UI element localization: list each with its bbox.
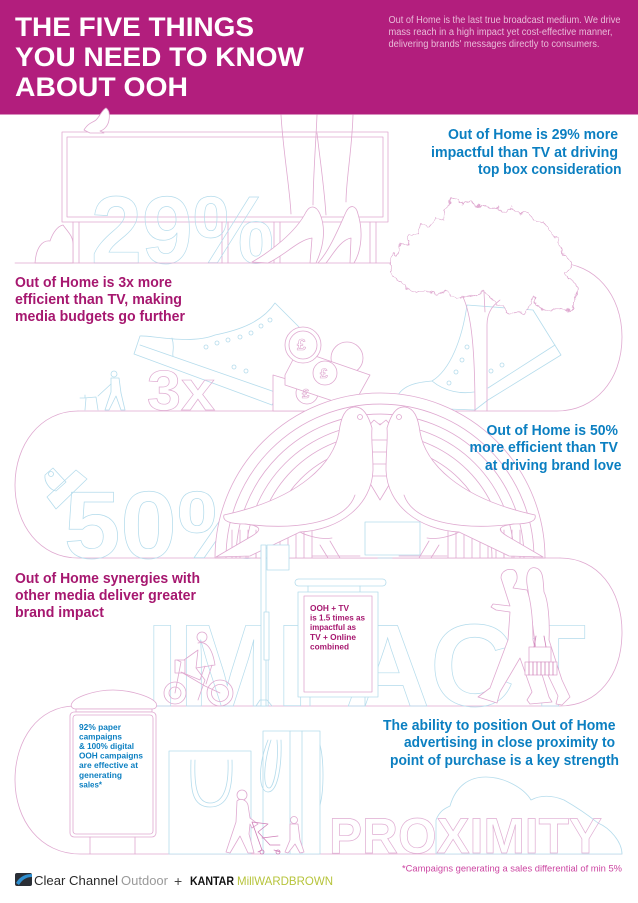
heading: proximity: The ability to position Out of Home <box>383 718 616 734</box>
icon: coins and notes: £ <box>302 386 310 401</box>
legs and heels <box>252 115 361 263</box>
heading: synergies: other media deliver greater <box>15 588 196 604</box>
heading: 3x <box>15 275 185 325</box>
heading: proximity: point of purchase is a key strength <box>390 753 619 769</box>
billboard text: 92% paper <box>79 723 121 732</box>
woman with stroller <box>226 790 280 854</box>
heading: 29 percent: top box consideration <box>478 162 622 178</box>
heading: 50 percent: Out of Home is 50% <box>486 423 618 439</box>
shelter text: impactful as <box>310 623 357 632</box>
panel: 3x illustration <box>78 197 622 423</box>
cloud <box>35 225 73 263</box>
billboard text: are effective at <box>79 761 138 770</box>
logos: + <box>174 873 182 889</box>
billboard text: campaigns <box>79 732 123 742</box>
icon: coins and notes: £ <box>320 365 328 381</box>
logos: MillWARDBROWN <box>237 874 333 888</box>
big number 50%: 50% <box>64 472 267 579</box>
big number 3x: 3x <box>147 359 215 423</box>
heading: 50 percent: at driving brand love <box>485 458 622 474</box>
bus shelter <box>295 579 386 706</box>
heading: synergies: brand impact <box>15 605 104 621</box>
shopping bags <box>169 731 323 854</box>
heading: 3x: media budgets go further <box>15 309 185 325</box>
intro text: mass reach in a high impact yet cost-effective manner, <box>388 27 612 38</box>
shelter text: combined <box>310 642 349 652</box>
child <box>285 816 304 853</box>
billboard text: generating <box>79 771 122 780</box>
tree crown <box>390 197 578 314</box>
footnote: *Campaigns generating a sales differential of min 5% <box>402 864 622 874</box>
logos <box>15 873 333 889</box>
neck stripes <box>365 420 395 500</box>
icon: clear channel mark <box>15 873 32 886</box>
billboard <box>62 132 388 263</box>
heading: proximity <box>383 718 619 769</box>
title: THE FIVE THINGS <box>15 12 254 42</box>
shelter text: is 1.5 times as <box>310 614 366 622</box>
billboard text: sales* <box>79 780 103 790</box>
intro text <box>388 15 620 50</box>
title <box>15 12 305 102</box>
heading: 50 percent <box>470 423 622 474</box>
sneaker right <box>397 305 561 410</box>
intro text: delivering brands' messages directly to consumers. <box>388 39 600 50</box>
billboard text: & 100% digital <box>79 742 134 751</box>
icon: coins and notes <box>273 327 370 411</box>
curve band right <box>75 558 622 706</box>
billboard text: OOH campaigns <box>79 752 144 760</box>
logos: KANTAR <box>190 874 234 888</box>
intro text: Out of Home is the last true broadcast medium. We drive <box>388 15 620 26</box>
logos: Outdoor <box>121 873 169 888</box>
icon: coins and notes: £ <box>297 337 306 354</box>
heading: synergies <box>15 571 200 621</box>
panel: 29 percent illustration <box>15 108 390 284</box>
icon: person walking dog <box>80 371 125 410</box>
cyclist <box>164 632 233 706</box>
billboard left <box>70 690 157 854</box>
cloud right <box>436 777 622 854</box>
couple walking with bags <box>478 568 570 705</box>
ground line <box>15 262 390 264</box>
tree trunk <box>463 292 500 411</box>
monitor <box>365 522 420 558</box>
curve band left <box>15 411 560 558</box>
big number 29%: 29% <box>91 177 274 284</box>
sneaker left <box>134 303 310 405</box>
panel: impact illustration <box>75 545 622 731</box>
curve band right <box>78 263 622 411</box>
icon: pigeon on billboard <box>84 108 109 133</box>
heading: 3x: Out of Home is 3x more <box>15 275 172 291</box>
heading: 29 percent <box>431 127 622 178</box>
panel: proximity illustration <box>15 690 622 864</box>
rainbow arch <box>215 393 545 558</box>
heading: 29 percent: Out of Home is 29% more <box>448 127 618 143</box>
heading: synergies: Out of Home synergies with <box>15 571 200 587</box>
curve band left <box>15 706 622 854</box>
dove right <box>386 407 543 558</box>
heading: 3x: efficient than TV, making <box>15 292 182 308</box>
icon: clip and tag <box>45 468 87 509</box>
shelter text <box>310 604 366 652</box>
heading: 29 percent: impactful than TV at driving <box>431 145 618 161</box>
big word PROXIMITY: PROXIMITY <box>329 808 602 864</box>
logos: Clear Channel <box>34 873 118 888</box>
header banner <box>0 0 638 114</box>
dove left <box>216 407 373 558</box>
sign pole <box>256 545 289 706</box>
title: ABOUT OOH <box>15 72 188 102</box>
panel: 50 percent illustration <box>15 393 560 579</box>
heading: proximity: advertising in close proximity to <box>404 735 615 751</box>
shelter text: TV + Online <box>310 633 357 642</box>
billboard text <box>79 723 144 790</box>
big word IMPACT: IMPACT <box>146 600 586 731</box>
heading: 50 percent: more efficient than TV <box>470 440 618 456</box>
title: YOU NEED TO KNOW <box>15 42 305 72</box>
shelter text: OOH + TV <box>310 604 350 613</box>
